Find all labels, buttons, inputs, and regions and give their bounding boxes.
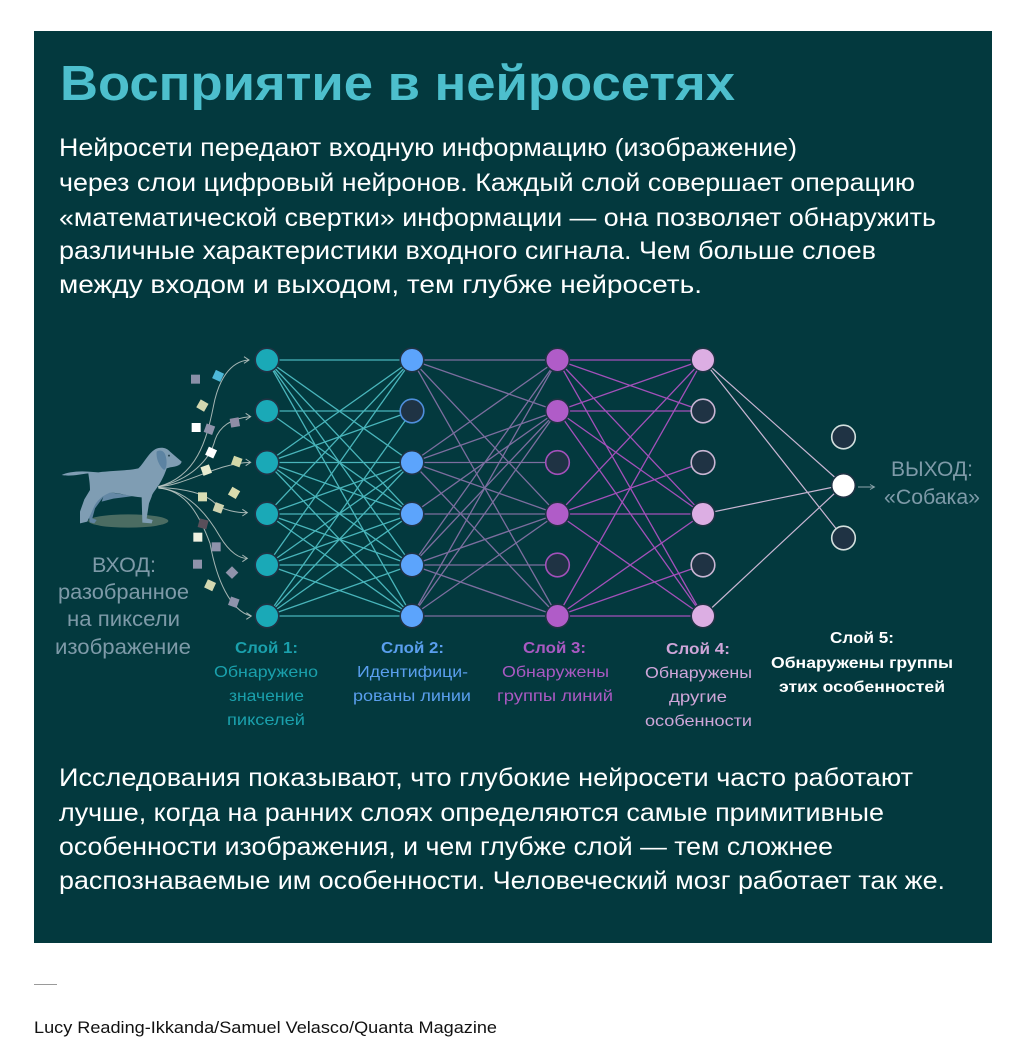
arrow: output xyxy=(858,484,874,490)
text block: intro xyxy=(59,134,936,299)
title: Восприятие в нейросетях xyxy=(60,57,735,111)
label: layer 5 xyxy=(771,630,953,696)
label: layer 3: Слой 3: xyxy=(523,640,586,657)
label: output: ВЫХОД: xyxy=(891,458,973,481)
connections: layer 2 to layer 3 xyxy=(412,360,558,616)
text block: intro: «математической свертки» информации — она позволяет обнаружить xyxy=(59,204,936,232)
label: layer 1: Обнаружено xyxy=(214,664,318,681)
connections: layer 4 to layer 5 xyxy=(703,360,844,616)
text block: conclusion: распознаваемые им особенности. Человеческий мозг работает так же. xyxy=(59,867,945,895)
text block: intro: между входом и выходом, тем глубже нейросеть. xyxy=(59,271,702,299)
pixel stream curves xyxy=(158,357,251,619)
label: layer 1: Слой 1: xyxy=(235,640,298,657)
connections: layer 3 to layer 4 xyxy=(558,360,703,616)
label: layer 2: рованы линии xyxy=(353,688,471,705)
credit: Lucy Reading-Ikkanda/Samuel Velasco/Quanta Magazine xyxy=(34,1018,497,1037)
text block: intro: Нейросети передают входную информацию (изображение) xyxy=(59,134,797,162)
layer 3 nodes xyxy=(546,348,569,628)
label: layer 4: Слой 4: xyxy=(666,641,730,658)
label: input: на пиксели xyxy=(67,608,180,631)
label: layer 5: этих особенностей xyxy=(779,679,945,696)
text block: conclusion xyxy=(59,764,945,895)
label: output xyxy=(884,458,980,509)
illustration: dog with pixel streams xyxy=(62,357,251,619)
label: layer 4: особенности xyxy=(645,713,752,730)
label: layer 3 xyxy=(497,640,613,705)
label: layer 3: Обнаружены xyxy=(502,664,609,681)
label: layer 2 xyxy=(353,640,471,705)
label: layer 4: другие xyxy=(669,689,727,706)
label: layer 2: Идентифици- xyxy=(357,664,468,681)
icon: dog xyxy=(62,448,182,523)
label: layer 4: Обнаружены xyxy=(645,665,752,682)
label: layer 3: группы линий xyxy=(497,688,613,705)
label: input xyxy=(55,554,191,659)
label: input: ВХОД: xyxy=(92,554,156,577)
label: layer 5: Слой 5: xyxy=(830,630,894,647)
pixels xyxy=(191,370,243,608)
text block: conclusion: Исследования показывают, что глубокие нейросети часто работают xyxy=(59,764,914,792)
label: input: разобранное xyxy=(58,581,189,604)
label: output: «Собака» xyxy=(884,486,980,509)
dog shadow xyxy=(88,514,168,528)
layer 4 nodes xyxy=(691,348,715,628)
text block: conclusion: лучше, когда на ранних слоях определяются самые примитивные xyxy=(59,799,884,827)
layer 5 nodes xyxy=(832,425,855,550)
label: layer 5: Обнаружены группы xyxy=(771,655,953,672)
label: layer 1: пикселей xyxy=(227,712,305,729)
text block: intro: через слои цифровый нейронов. Каждый слой совершает операцию xyxy=(59,169,915,197)
chart: neural network diagram xyxy=(255,348,874,628)
layer 1 nodes xyxy=(255,348,279,628)
layer 2 nodes xyxy=(400,348,424,628)
label: input: изображение xyxy=(55,636,191,659)
text block: intro: различные характеристики входного сигнала. Чем больше слоев xyxy=(59,237,876,265)
label: layer 2: Слой 2: xyxy=(381,640,444,657)
label: layer 1: значение xyxy=(229,688,304,705)
label: layer 1 xyxy=(214,640,318,729)
connections: layer 1 to layer 2 xyxy=(267,360,412,616)
text block: conclusion: особенности изображения, и чем глубже слой — тем сложнее xyxy=(59,833,833,861)
label: layer 4 xyxy=(645,641,752,730)
